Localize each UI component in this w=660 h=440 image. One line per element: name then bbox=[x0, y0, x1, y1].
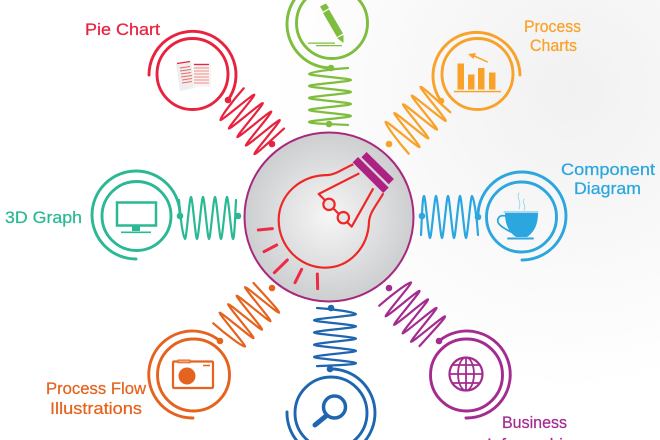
disc bbox=[244, 132, 414, 302]
spiral arc: pencil bbox=[287, 0, 331, 68]
label: Process Flow Illustrations bbox=[46, 379, 147, 418]
ring: process flow bbox=[158, 339, 230, 411]
label: Process Charts: Process bbox=[524, 17, 581, 36]
spiral arc: pie chart bbox=[149, 31, 236, 100]
connector dots: component diagram bbox=[419, 213, 481, 220]
label: Process Flow Illustrations: Illustrations bbox=[50, 399, 142, 418]
label: Component Diagram: Diagram bbox=[574, 179, 641, 198]
icon: magnifying glass bbox=[315, 396, 346, 425]
label: Process Charts: Charts bbox=[530, 36, 577, 55]
icon: coffee cup bbox=[498, 193, 538, 238]
label: Component Diagram bbox=[561, 160, 655, 198]
label: Component Diagram: Component bbox=[561, 160, 655, 179]
ring: 3D graph bbox=[102, 182, 171, 250]
panel: business infographics module bbox=[377, 278, 580, 440]
label: Business Infographics bbox=[487, 413, 580, 440]
panel: process flow illustrations module bbox=[46, 281, 281, 418]
connector dots: pencil bbox=[326, 65, 334, 127]
ring: process charts bbox=[442, 38, 513, 110]
icon: globe bbox=[450, 358, 482, 390]
spiral arc: 3D graph bbox=[92, 171, 180, 259]
label: Pie Chart: Pie Chart bbox=[85, 20, 160, 39]
connector dots: process flow bbox=[217, 285, 275, 344]
panel: 3D graph module bbox=[5, 171, 241, 259]
spring: component diagram bbox=[421, 196, 478, 238]
ring: pencil bbox=[296, 0, 368, 58]
spring: pencil bbox=[309, 68, 351, 125]
connector dots: pie chart bbox=[225, 97, 275, 147]
spiral arc: component diagram bbox=[478, 172, 566, 260]
connector dots: magnifier bbox=[327, 305, 334, 372]
spring: process flow bbox=[211, 281, 281, 351]
spring: business bbox=[377, 278, 447, 348]
ring: pie chart bbox=[157, 38, 228, 110]
panel: pie chart module bbox=[85, 20, 286, 156]
icon: documents bbox=[176, 61, 211, 91]
connector dots: 3D graph bbox=[177, 213, 241, 219]
central disc with light bulb bbox=[244, 132, 414, 302]
panel: component diagram module bbox=[419, 160, 655, 260]
ring: business bbox=[430, 339, 502, 411]
spring: magnifier bbox=[314, 308, 356, 366]
panel: process charts module bbox=[381, 17, 581, 156]
icon: camera bbox=[173, 360, 213, 388]
spring: 3D graph bbox=[179, 197, 236, 239]
icon: pencil bbox=[308, 4, 344, 46]
spiral arc: process flow bbox=[149, 331, 220, 418]
icon: bar chart bbox=[454, 53, 501, 92]
label: Process Charts bbox=[524, 17, 581, 55]
light rays bbox=[258, 229, 318, 289]
spring: pie chart bbox=[216, 86, 286, 156]
label: Process Flow Illustrations: Process Flow bbox=[46, 379, 147, 398]
spiral arc: process charts bbox=[433, 32, 520, 101]
ring: magnifier bbox=[295, 377, 367, 440]
connector dots: business bbox=[386, 285, 442, 344]
label: 3D Graph: 3D Graph bbox=[5, 208, 82, 227]
spiral arc: business bbox=[439, 331, 510, 418]
spring: process charts bbox=[381, 85, 452, 156]
spiral arc: magnifier bbox=[287, 369, 375, 440]
ring: component diagram bbox=[486, 182, 556, 252]
label: Business Infographics: Business bbox=[502, 413, 567, 432]
icon: light bulb bbox=[258, 155, 391, 289]
bulb cap bbox=[355, 155, 391, 190]
bulb outline bbox=[279, 164, 383, 268]
icon: monitor bbox=[117, 202, 156, 232]
connector dots: process charts bbox=[386, 98, 444, 147]
panel: pencil module bbox=[287, 0, 368, 127]
panel: magnifier module bbox=[287, 305, 375, 440]
